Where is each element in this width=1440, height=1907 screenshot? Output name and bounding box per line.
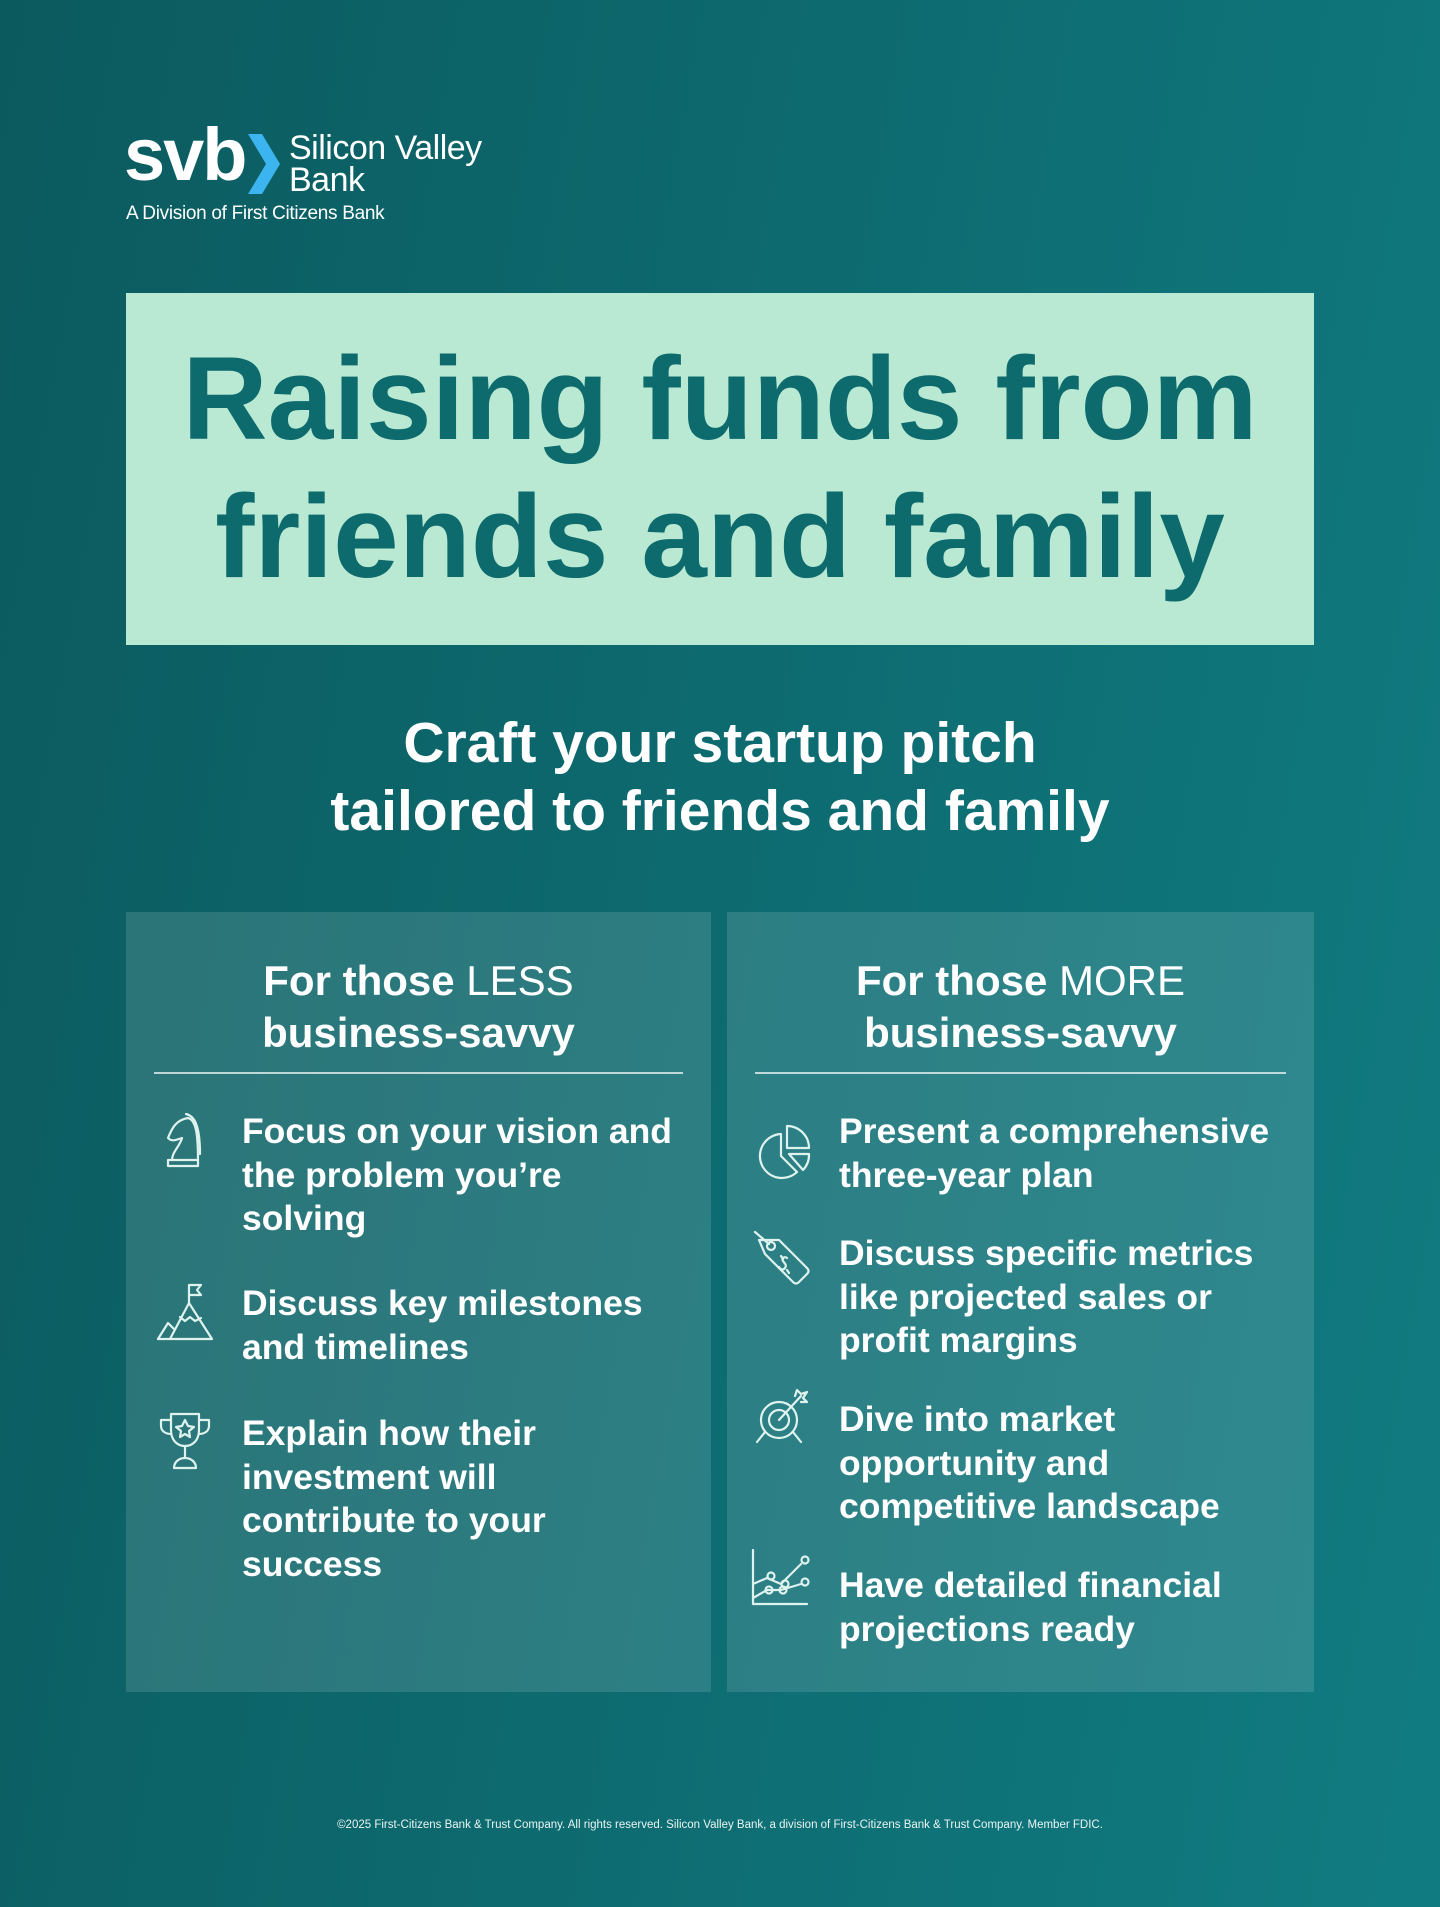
- item 3: investment will: [242, 1456, 496, 1496]
- item 1: the problem you’re: [242, 1154, 562, 1194]
- title box: [126, 293, 1314, 645]
- item 3: opportunity and: [839, 1442, 1109, 1482]
- item 4: [839, 1565, 1222, 1648]
- title: Raising funds from: [182, 333, 1258, 465]
- item 2: like projected sales or: [839, 1276, 1212, 1316]
- icon: pie chart: [758, 1124, 810, 1180]
- item 2: and timelines: [242, 1326, 469, 1366]
- title: [182, 333, 1258, 603]
- icon: trophy: [160, 1412, 210, 1470]
- item 1: [839, 1111, 1269, 1194]
- logo: Bank: [289, 161, 364, 199]
- panel heading: For those MORE: [856, 957, 1185, 1004]
- logo: Silicon Valley: [289, 129, 482, 167]
- icon: target: [756, 1388, 808, 1444]
- logo: svb: [124, 113, 246, 196]
- item 1: Focus on your vision and: [242, 1111, 672, 1151]
- item 2: Discuss key milestones: [242, 1283, 643, 1323]
- icon: line chart: [752, 1548, 810, 1606]
- icon: knight: [166, 1112, 202, 1168]
- item 3: [839, 1399, 1220, 1526]
- title: friends and family: [215, 471, 1225, 603]
- logo: [124, 113, 482, 224]
- panel heading: business-savvy: [262, 1009, 575, 1056]
- icon: price tag: [754, 1230, 810, 1285]
- item 4: projections ready: [839, 1608, 1135, 1648]
- footer: ©2025 First-Citizens Bank & Trust Company. All rights reserved. Silicon Valley Bank, a division of First-Citizens Bank & Trust Company. Member FDIC.: [337, 1819, 1103, 1831]
- item 1: solving: [242, 1198, 366, 1238]
- item 1: three-year plan: [839, 1154, 1094, 1194]
- panel heading: [856, 957, 1185, 1056]
- subtitle: [330, 711, 1110, 843]
- icon: mountain flag: [156, 1284, 214, 1340]
- item 3: Dive into market: [839, 1399, 1115, 1439]
- logo: A Division of First Citizens Bank: [126, 203, 384, 224]
- item 3: [242, 1413, 546, 1584]
- panel heading: business-savvy: [864, 1009, 1177, 1056]
- panel: more business-savvy: [727, 912, 1314, 1692]
- icon: chevron: [248, 134, 280, 194]
- panel heading: For those LESS: [263, 957, 574, 1004]
- panel heading: [262, 957, 575, 1056]
- panel: less business-savvy: [126, 912, 711, 1692]
- item 3: competitive landscape: [839, 1486, 1220, 1526]
- item 1: [242, 1111, 672, 1238]
- item 3: success: [242, 1544, 382, 1584]
- item 1: Present a comprehensive: [839, 1111, 1269, 1151]
- item 3: Explain how their: [242, 1413, 536, 1453]
- item 2: [242, 1283, 643, 1366]
- item 2: [839, 1233, 1253, 1360]
- subtitle: tailored to friends and family: [330, 779, 1110, 843]
- item 4: Have detailed financial: [839, 1565, 1222, 1605]
- subtitle: Craft your startup pitch: [403, 711, 1037, 775]
- item 3: contribute to your: [242, 1500, 546, 1540]
- item 2: Discuss specific metrics: [839, 1233, 1253, 1273]
- item 2: profit margins: [839, 1320, 1078, 1360]
